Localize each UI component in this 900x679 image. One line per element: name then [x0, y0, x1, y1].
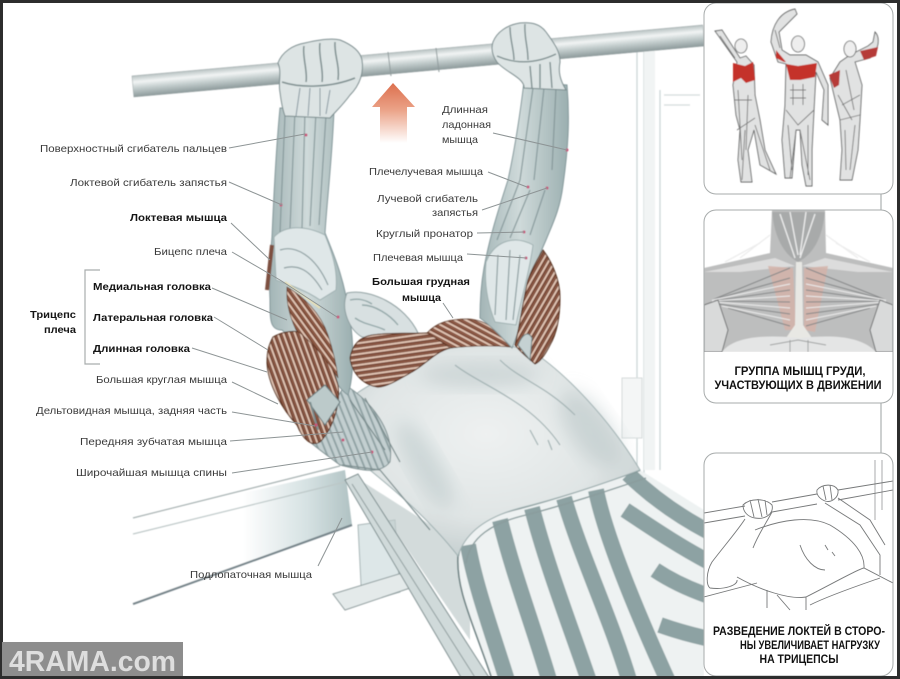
labels: right column: Плечелучевая мышца	[369, 166, 483, 178]
panel: elbow position sketch	[704, 453, 893, 676]
pectoral muscle	[350, 319, 510, 387]
panel: muscles involved, full body figures	[704, 3, 893, 194]
labels: right column: Плечевая мышца	[373, 252, 463, 264]
right fist	[492, 23, 566, 90]
labels: right column: ладонная	[442, 119, 491, 131]
labels: right column: Лучевой сгибатель	[377, 193, 479, 205]
labels: left column: Большая круглая мышца	[96, 374, 227, 386]
figure: rear-side view right	[829, 32, 878, 180]
line sketch of bench press	[704, 460, 893, 610]
labels: left column: Широчайшая мышца спины	[76, 467, 227, 479]
figure: front view middle	[771, 9, 828, 186]
figure: side view left	[715, 30, 776, 182]
labels: right column: Длинная	[442, 104, 488, 116]
left triceps	[267, 287, 340, 444]
chest panel caption	[714, 364, 882, 392]
labels: left column: Латеральная головка	[93, 312, 213, 324]
chest illustration	[704, 210, 893, 352]
right arm	[480, 82, 568, 348]
labels: left column: Локтевая мышца	[130, 212, 227, 224]
labels: left column: Дельтовидная мышца, задняя часть	[36, 405, 228, 417]
rack uprights	[622, 40, 700, 480]
shorts	[458, 470, 715, 679]
sketch panel caption: НА ТРИЦЕПСЫ	[760, 652, 838, 666]
barbell	[132, 25, 705, 97]
labels: left column: Передняя зубчатая мышца	[80, 436, 227, 448]
leader lines	[192, 133, 567, 566]
labels: right column: Круглый пронатор	[376, 228, 473, 240]
bench backrest	[133, 466, 352, 604]
bench support and foot	[333, 474, 490, 679]
triceps group label with bracket: Трицепс	[30, 309, 76, 321]
labels: left column: Бицепс плеча	[154, 246, 227, 258]
labels: left column: Длинная головка	[93, 343, 190, 355]
labels: left column: Поверхностный сгибатель пальцев	[40, 143, 227, 155]
labels: right column: мышца	[442, 134, 478, 146]
head	[345, 292, 418, 338]
right triceps	[515, 250, 560, 364]
labels: left column: Медиальная головка	[93, 281, 211, 293]
left fist	[278, 39, 362, 118]
labels: right column: мышца	[402, 292, 441, 304]
chest panel caption: УЧАСТВУЮЩИХ В ДВИЖЕНИИ	[714, 378, 882, 392]
labels: left column: Локтевой сгибатель запястья	[70, 177, 227, 189]
labels: right column	[369, 104, 491, 304]
lat and serratus	[300, 385, 430, 530]
muscle marker dots	[280, 134, 568, 454]
triceps group label with bracket: плеча	[44, 324, 76, 336]
torso	[332, 345, 640, 556]
left forearm and upper arm	[267, 108, 353, 395]
watermark: 4RAMA.com	[9, 646, 176, 678]
panel: chest muscles	[704, 210, 893, 404]
chest panel caption: ГРУППА МЫШЦ ГРУДИ,	[734, 364, 866, 378]
labels: left column: Подлопаточная мышца	[190, 569, 312, 581]
sketch panel caption	[713, 623, 885, 666]
labels: left column	[36, 143, 312, 581]
connector lines between panels	[880, 194, 882, 453]
main illustration: bench press figure	[132, 23, 715, 679]
labels: right column: Большая грудная	[372, 276, 470, 288]
upward motion arrow	[372, 83, 415, 143]
triceps group label with bracket	[30, 270, 100, 364]
labels: right column: запястья	[432, 207, 478, 219]
